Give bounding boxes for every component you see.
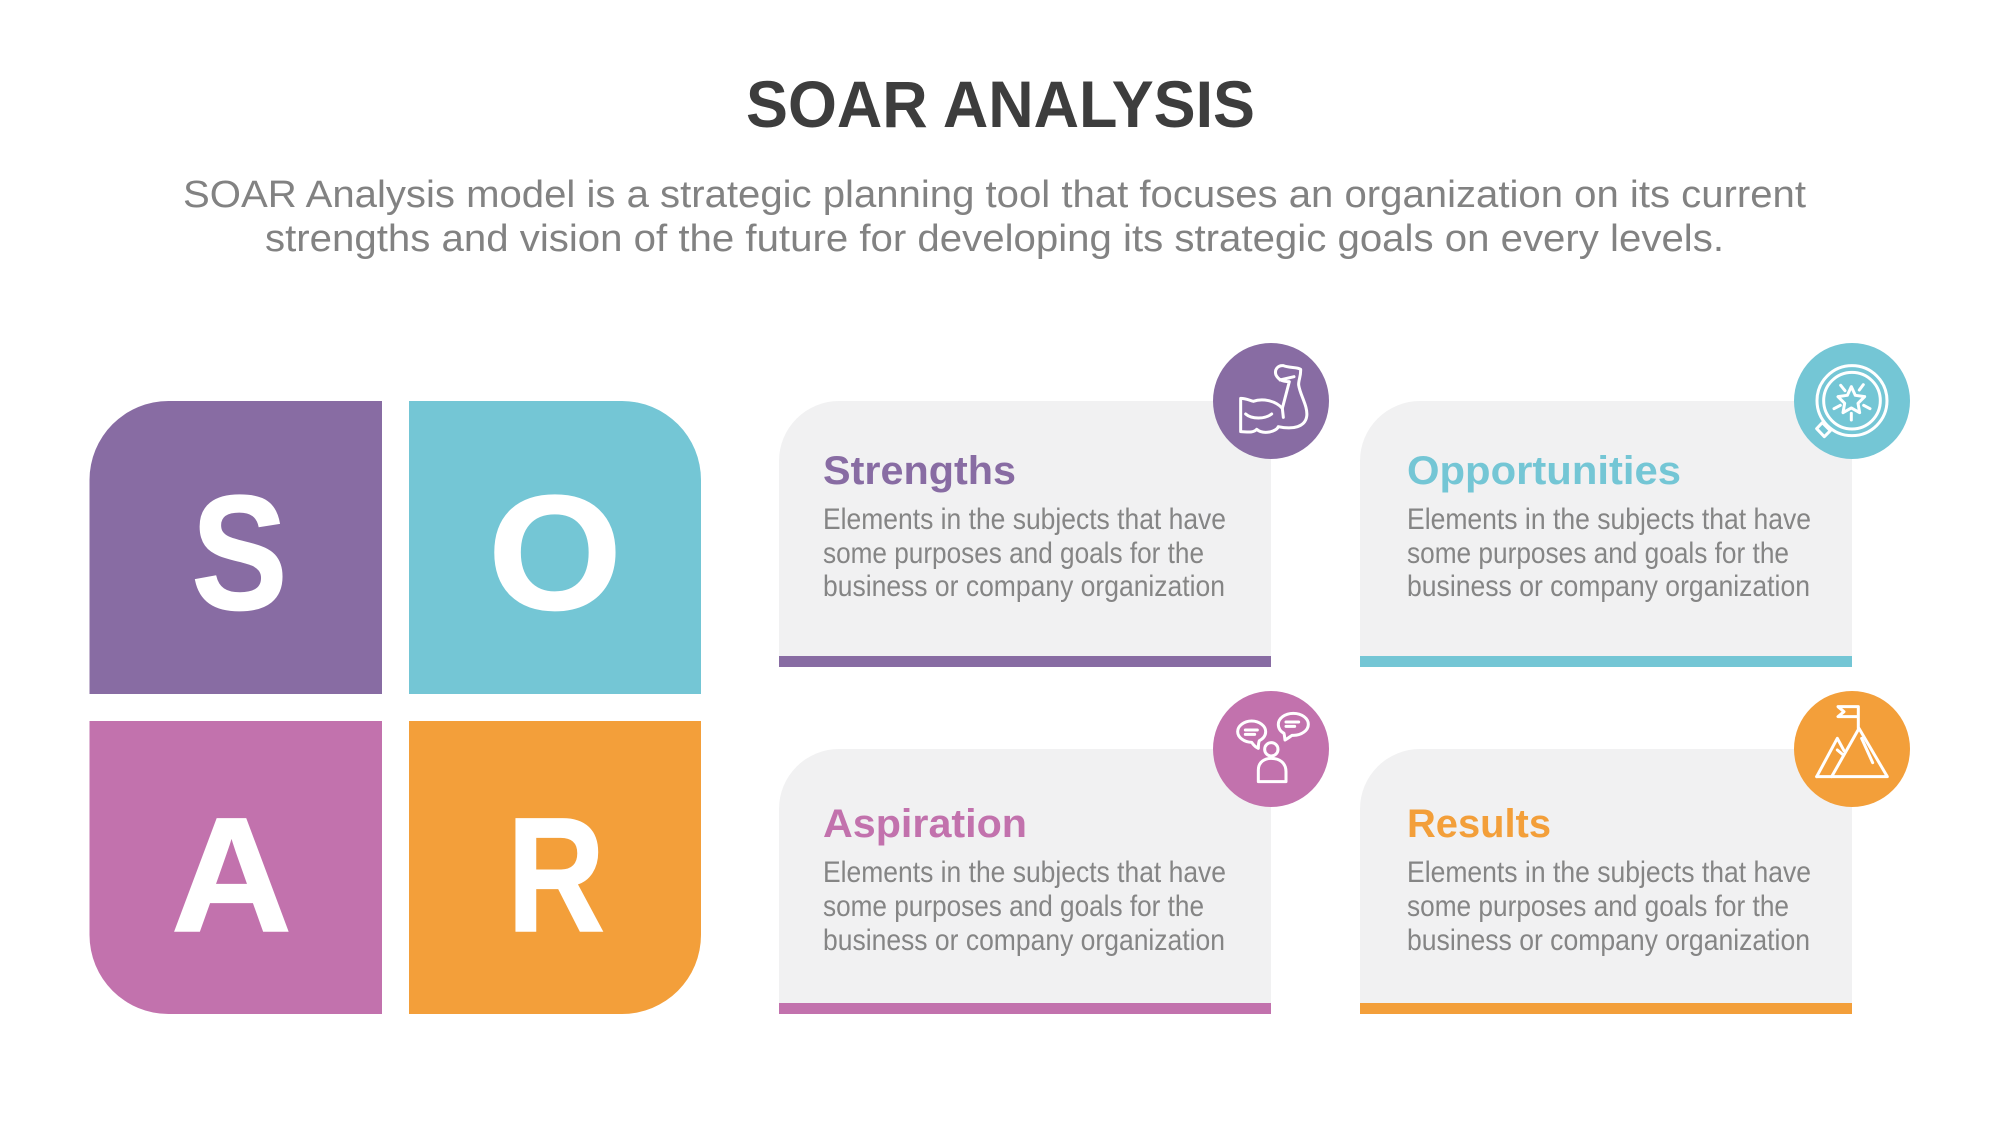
tile: S — [90, 401, 382, 694]
subtitle text block: SOAR Analysis model is a strategic planning tool that focuses an organization on its current — [183, 174, 1806, 216]
tile: R: R — [507, 783, 605, 966]
text: Aspiration description — [823, 856, 1226, 957]
text: Strengths description: business or company organization — [823, 570, 1225, 603]
text: Opportunities description: some purposes and goals for the — [1407, 537, 1789, 570]
icon: magnifier with star — [1794, 343, 1910, 459]
tile: O: O — [488, 461, 622, 644]
title: SOAR ANALYSIS — [746, 67, 1255, 141]
panel: Results — [1360, 691, 1910, 1014]
text: Strengths description — [823, 503, 1226, 603]
tile: O — [409, 401, 701, 694]
text: Aspiration description: business or company organization — [823, 924, 1225, 957]
panel: Aspiration — [779, 691, 1329, 1014]
text: Strengths description: Elements in the subjects that have — [823, 503, 1226, 536]
tile: R — [409, 721, 701, 1014]
text: Aspiration description: Elements in the subjects that have — [823, 856, 1226, 889]
SOAR letter grid — [90, 401, 701, 1014]
tile: A — [90, 721, 382, 1014]
heading: Aspiration: Aspiration — [823, 802, 1027, 846]
icon: mountain with flag — [1794, 691, 1910, 807]
text: Results description: some purposes and goals for the — [1407, 890, 1789, 923]
text: Opportunities description — [1407, 503, 1811, 603]
text: Results description: business or company organization — [1407, 924, 1810, 957]
text: Opportunities description: Elements in the subjects that have — [1407, 503, 1811, 536]
text: Results description: Elements in the subjects that have — [1407, 856, 1811, 889]
heading: Results: Results — [1407, 802, 1551, 846]
tile: A: A — [171, 783, 292, 966]
icon: person with speech bubbles — [1213, 691, 1329, 807]
icon: flexed arm — [1213, 343, 1329, 459]
subtitle text block: strengths and vision of the future for developing its strategic goals on every levels. — [265, 218, 1724, 260]
text: Aspiration description: some purposes and goals for the — [823, 890, 1204, 923]
heading: Strengths: Strengths — [823, 449, 1016, 493]
text: Opportunities description: business or company organization — [1407, 570, 1810, 603]
panel: Opportunities — [1360, 343, 1910, 667]
text: Results description — [1407, 856, 1811, 957]
tile: S: S — [192, 461, 288, 644]
text: Strengths description: some purposes and goals for the — [823, 537, 1204, 570]
heading: Opportunities: Opportunities — [1407, 449, 1681, 493]
panel: Strengths — [779, 343, 1329, 667]
subtitle text block — [183, 174, 1806, 260]
